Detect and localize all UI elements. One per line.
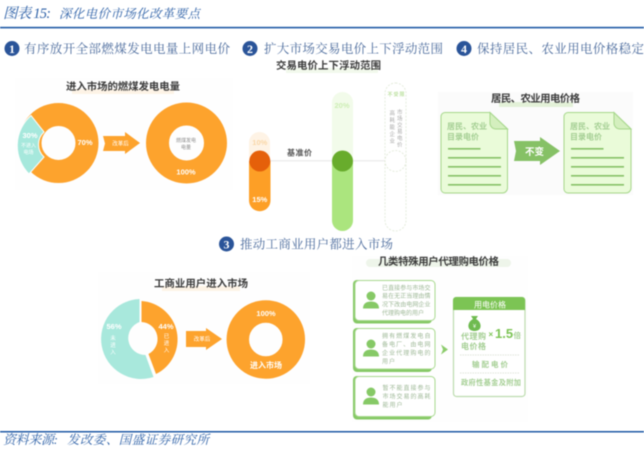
donut: after reform: 电量 <box>181 144 191 151</box>
price box: 用电价格 <box>474 300 506 310</box>
arrow: after reform <box>186 328 222 350</box>
panel: price fluctuation range <box>249 59 406 231</box>
chart heading: coal power: 进入市场的燃煤发电电量 <box>66 80 180 93</box>
donut: before reform: 进 <box>164 339 170 347</box>
panel: agency purchase price <box>352 255 528 422</box>
document: before: 目录电价 <box>447 132 479 142</box>
heading 3: 3 <box>224 237 230 251</box>
donut: before reform: 56% <box>106 322 122 331</box>
card: self-owned plant users <box>353 328 435 372</box>
price box: 倍 <box>514 330 522 340</box>
document: before: 居民、农业 <box>447 121 487 131</box>
document: after: 目录电价 <box>570 132 602 142</box>
panel: residential and agricultural price <box>438 92 633 195</box>
card: direct market users: 代理购电的用户 <box>382 309 424 317</box>
bar: orange range <box>249 132 270 211</box>
arrow: after reform: 改革后 <box>194 335 211 343</box>
card: high energy users: 市场交易的高耗 <box>382 392 430 400</box>
donut: after reform: 燃煤发电 <box>176 137 196 144</box>
chart heading: agency purchase: 几类特殊用户代理购电价格 <box>378 255 500 268</box>
card: self-owned plant users: 企业代理购电的 <box>382 349 430 357</box>
title <box>3 5 201 22</box>
price box: × <box>488 330 494 339</box>
card: high energy users: 能用户 <box>382 401 402 409</box>
donut: before reform: 30% <box>22 131 38 140</box>
donut: before reform: 未 <box>110 334 116 342</box>
heading 1: 有序放开全部燃煤发电电量上网电价 <box>24 41 230 56</box>
card: self-owned plant users: 备电厂、由电网 <box>382 340 430 348</box>
donut: before reform: 进 <box>110 341 116 349</box>
bar: orange range: 15% <box>252 195 268 204</box>
card: self-owned plant users: 拥有燃煤发电自 <box>382 332 430 340</box>
source note <box>3 432 211 447</box>
bar: dashed unaffected range: 高耗能企业 <box>390 109 396 145</box>
price box: 输配电价 <box>472 359 508 369</box>
donut: before reform: 入 <box>110 350 116 356</box>
bar: green range <box>332 92 353 231</box>
source note: 发改委、国盛证券研究所 <box>67 433 211 447</box>
panel: industrial and commercial users <box>98 272 310 384</box>
donut: before reform: 入 <box>164 348 170 354</box>
bar: green range: 20% <box>334 101 350 110</box>
heading 2: 2 <box>247 42 253 56</box>
document: after <box>564 112 631 193</box>
title rule <box>0 27 644 28</box>
donut: after reform: 进入市场 <box>250 360 282 370</box>
arrow: unchanged: 不变 <box>525 146 544 158</box>
heading 4: 4 <box>461 42 467 56</box>
heading 4: 保持居民、农业用电价格稳定 <box>477 41 644 56</box>
donut: before reform: 电场 <box>23 149 34 156</box>
donut: before reform <box>101 299 178 379</box>
card: direct market users: 已直接参与市场交 <box>382 284 430 292</box>
donut: before reform: 44% <box>158 322 174 331</box>
donut: after reform <box>238 309 294 370</box>
card: high energy users <box>353 376 435 420</box>
card: self-owned plant users: 用户 <box>382 358 395 366</box>
footer rule <box>0 431 644 432</box>
price box <box>453 297 525 396</box>
icon: money bag: ¥ <box>473 324 477 330</box>
document: before <box>441 112 508 193</box>
donut: before reform <box>17 114 93 174</box>
card: direct market users: 况下改由电网企业 <box>382 300 430 308</box>
price box: 1.5 <box>495 326 513 341</box>
bar: dashed unaffected range: 市场交易电价 <box>397 108 403 148</box>
price box: 代理购 <box>461 331 486 341</box>
chart heading: residential price: 居民、农业用电价格 <box>491 92 581 105</box>
card: direct market users <box>353 280 435 324</box>
bar: orange range: 10% <box>252 138 268 147</box>
heading 3: 推动工商业用户都进入市场 <box>240 236 393 252</box>
document: after: 居民、农业 <box>570 121 610 131</box>
price box: 政府性基金及附加 <box>461 378 521 387</box>
bar: dashed unaffected range: 不受限 <box>388 91 404 98</box>
donut: after reform: 100% <box>256 309 276 318</box>
chart heading: industrial users: 工商业用户进入市场 <box>154 277 248 290</box>
donut: before reform: 已 <box>164 333 170 340</box>
label: base price: 基准价 <box>287 148 312 158</box>
donut: after reform <box>158 114 216 176</box>
arrow: after reform <box>103 132 140 154</box>
chevron <box>441 344 448 354</box>
bar: dashed unaffected range <box>385 83 406 231</box>
heading 1: 1 <box>9 42 15 56</box>
panel: coal power entering the market <box>15 78 233 190</box>
card: direct market users: 易在无正当理由情 <box>382 292 430 300</box>
donut: before reform: 70% <box>77 138 93 147</box>
source note: 资料来源: <box>3 432 58 447</box>
title: 深化电价市场化改革要点 <box>59 7 201 21</box>
chart heading: price range: 交易电价上下浮动范围 <box>276 59 381 72</box>
card: high energy users: 暂不能直接参与 <box>382 384 430 392</box>
heading 2: 扩大市场交易电价上下浮动范围 <box>264 41 443 56</box>
donut: before reform: 不进入 <box>21 142 36 149</box>
title: 图表 15: <box>3 5 51 22</box>
baseline <box>270 160 386 162</box>
donut: after reform: 100% <box>176 168 196 176</box>
price box: 电价格 <box>461 341 486 351</box>
arrow: after reform: 改革后 <box>112 140 129 148</box>
arrow: unchanged <box>514 137 560 165</box>
